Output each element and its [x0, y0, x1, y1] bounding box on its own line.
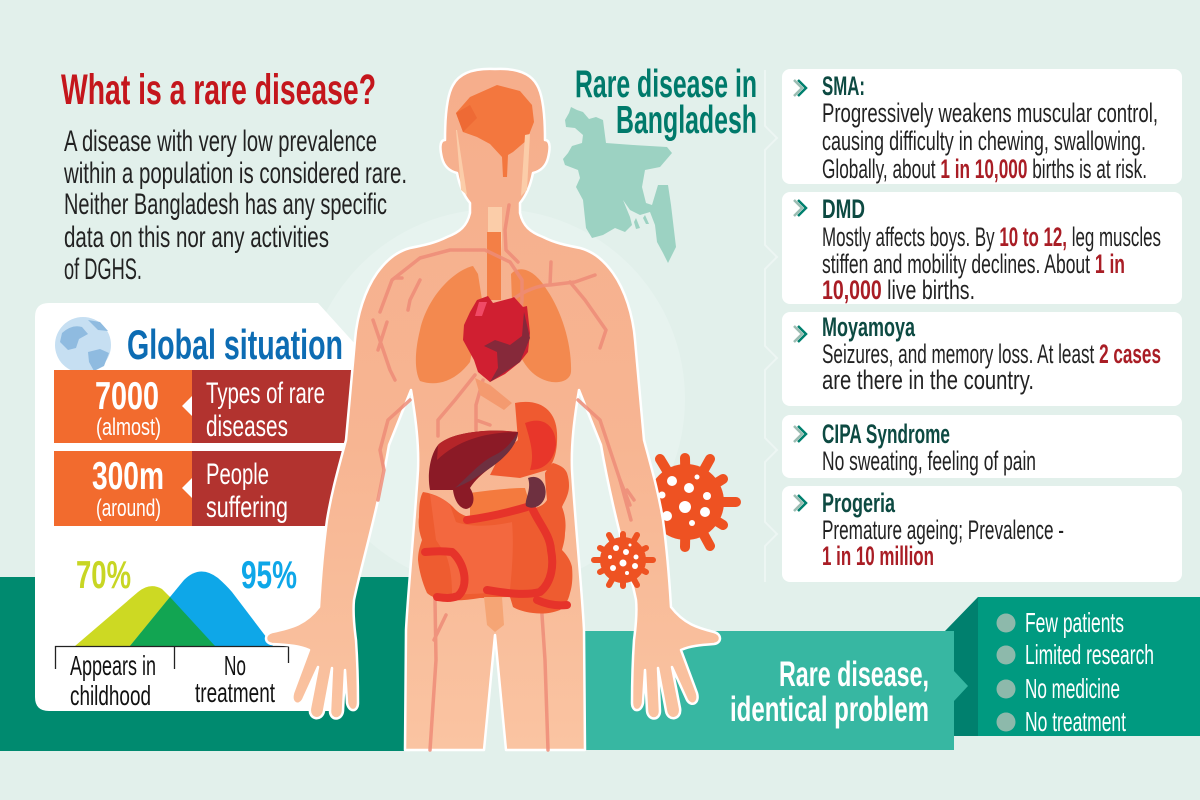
chart: overlapping peaks: 95%: [241, 554, 297, 597]
stat row: 7000 types: [54, 370, 367, 443]
panel: problem list: [945, 597, 1200, 737]
organ: heart: [463, 296, 530, 382]
icon: chevrons: [794, 200, 806, 216]
panel: Progeria: Progeria: [822, 488, 896, 518]
chart: overlapping peaks: treatment: [195, 677, 275, 708]
organ: intestines: [418, 463, 572, 614]
stat row: 300m people: (around): [96, 495, 161, 522]
chart: overlapping peaks: Appears in: [70, 650, 156, 681]
icon: globe: [55, 317, 111, 373]
banner: identical problem: [585, 631, 968, 750]
stat row: 300m people: People: [206, 458, 269, 491]
chart: overlapping peaks: No: [224, 650, 246, 681]
panel: problem list: No medicine: [1025, 673, 1120, 704]
organ: kidney: [526, 477, 546, 508]
stat row: 7000 types: 7000: [95, 375, 159, 418]
panel: CIPA Syndrome: No sweating, feeling of pain: [822, 446, 1036, 476]
panel: Progeria: [782, 486, 1182, 582]
organ: right lung: [511, 269, 571, 382]
stat row: 7000 types: (almost): [96, 414, 161, 441]
figure: human body: [266, 69, 720, 750]
panel: DMD: [782, 192, 1182, 305]
organ: trachea: [487, 232, 501, 300]
chart: overlapping peaks: 70%: [76, 554, 131, 597]
icon: large virus: [648, 458, 736, 547]
organ: stomach: [490, 402, 557, 478]
panel: SMA: SMA:: [822, 71, 865, 101]
panel: problem list: No treatment: [1025, 706, 1126, 737]
stat row: 300m people: 300m: [92, 455, 164, 498]
banner: identical problem: Rare disease,: [779, 655, 929, 694]
text block: definition: [63, 125, 407, 286]
heading: rare disease in Bangladesh: Bangladesh: [616, 99, 757, 142]
panel: problem list: Few patients: [1025, 607, 1124, 638]
stat row: 7000 types: Types of rare: [206, 377, 325, 410]
text block: definition: Neither Bangladesh has any specific: [64, 188, 387, 221]
bottom left teal band: [0, 577, 420, 751]
panel: SMA: [782, 69, 1182, 184]
heading: rare disease in Bangladesh: Rare disease in: [575, 63, 757, 106]
heading: global situation: Global situation: [127, 321, 343, 368]
panel: DMD: 10,000 live births.: [822, 275, 975, 305]
stat row: 300m people: [54, 451, 367, 526]
icon: small virus: [594, 534, 653, 586]
panel: DMD: DMD: [822, 194, 865, 224]
text block: definition: of DGHS.: [64, 253, 142, 286]
panel: Progeria: 1 in 10 million: [822, 541, 934, 571]
panel: Moyamoya: Moyamoya: [822, 312, 916, 342]
icon: chevrons: [794, 80, 806, 96]
panel: global situation: [35, 303, 367, 711]
banner: identical problem: identical problem: [730, 690, 929, 729]
text block: definition: data on this nor any activities: [64, 221, 329, 254]
vessels: [373, 205, 634, 750]
icon: chevrons: [794, 426, 806, 442]
panel: Progeria: Premature ageing; Prevalence -: [822, 515, 1064, 545]
icon: chevrons: [794, 495, 806, 511]
panel: Moyamoya: are there in the country.: [822, 365, 1034, 395]
chart: overlapping peaks: childhood: [70, 680, 151, 711]
organ: left lung: [416, 266, 482, 383]
text block: definition: A disease with very low prevalence: [64, 125, 377, 158]
panel: CIPA Syndrome: [782, 415, 1182, 478]
map: Bangladesh: [563, 107, 676, 263]
stat row: 7000 types: diseases: [206, 410, 288, 443]
heading: rare disease in Bangladesh: [575, 63, 757, 142]
highlights: neck and arms: [456, 130, 530, 300]
icon: chevrons: [794, 326, 806, 342]
anatomical lower shape: [484, 597, 504, 632]
title: What is a rare disease?: [61, 66, 376, 114]
organ: liver: [429, 431, 518, 509]
organ: brain: [456, 85, 534, 177]
stat row: 300m people: suffering: [206, 491, 288, 524]
organ: esophagus: [475, 378, 512, 410]
chart: overlapping peaks: [56, 554, 297, 711]
panel: CIPA Syndrome: CIPA Syndrome: [822, 419, 950, 449]
panel: Moyamoya: [782, 312, 1182, 406]
text block: definition: within a population is considered rare.: [63, 157, 407, 190]
